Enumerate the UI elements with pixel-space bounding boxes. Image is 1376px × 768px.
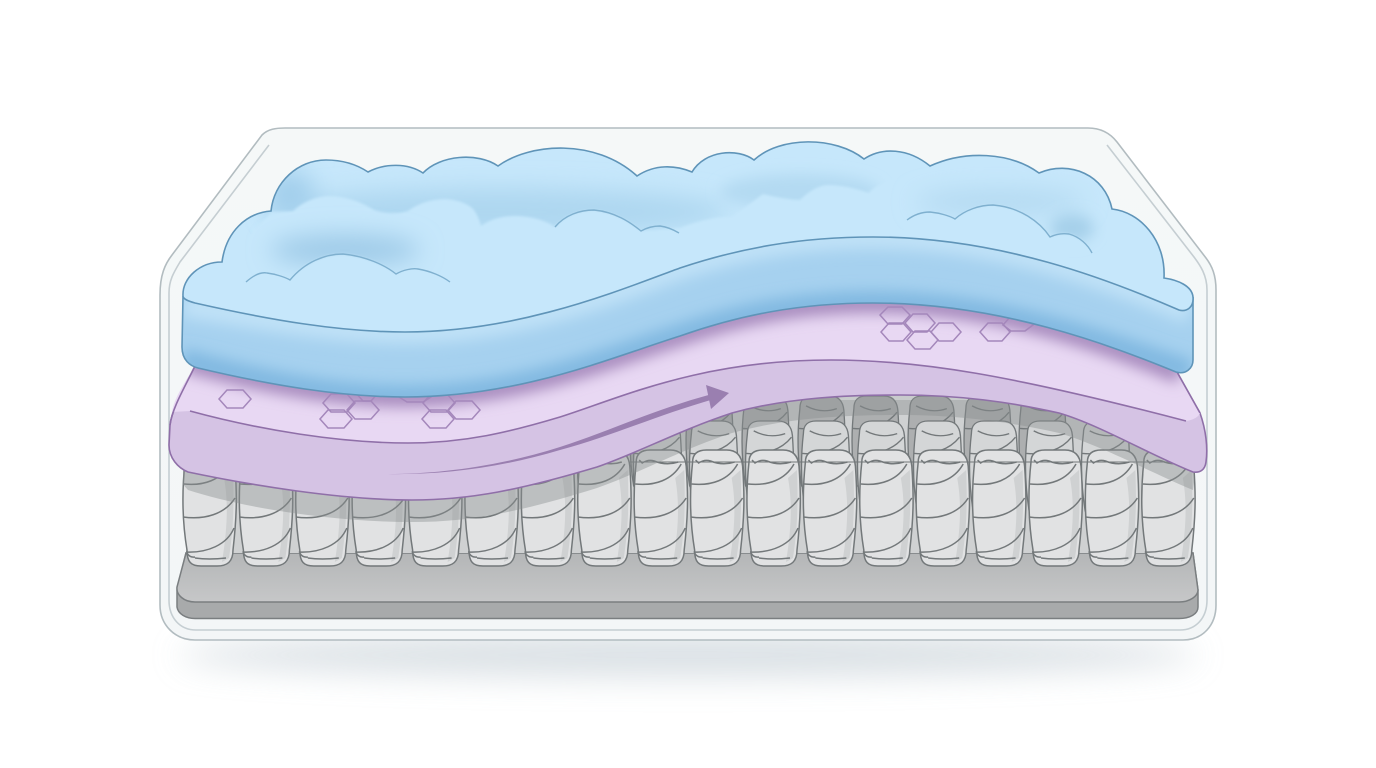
contour lobes fill xyxy=(301,206,1082,276)
flow arrow xyxy=(388,385,729,474)
pocket springs: back row xyxy=(630,396,1066,486)
blue cloud top surface xyxy=(183,142,1193,332)
mattress cross-section illustration xyxy=(159,127,1217,690)
cast shadow on springs xyxy=(183,396,1194,522)
backing behind springs xyxy=(186,400,1190,553)
light foam lobe xyxy=(267,185,876,240)
back shading xyxy=(265,170,880,236)
thin lobe contour lines xyxy=(246,205,1092,282)
transparent outer casing xyxy=(160,128,1216,640)
pocket springs: middle row xyxy=(578,421,1130,511)
soft shadows above contours xyxy=(270,190,1094,266)
hexagon texture xyxy=(219,307,1033,428)
ground shadow xyxy=(178,633,1198,677)
blue foam layer side xyxy=(182,230,1193,397)
base layer xyxy=(177,553,1198,618)
purple comfort layer xyxy=(169,285,1207,500)
pocket springs: front row xyxy=(183,450,1195,566)
